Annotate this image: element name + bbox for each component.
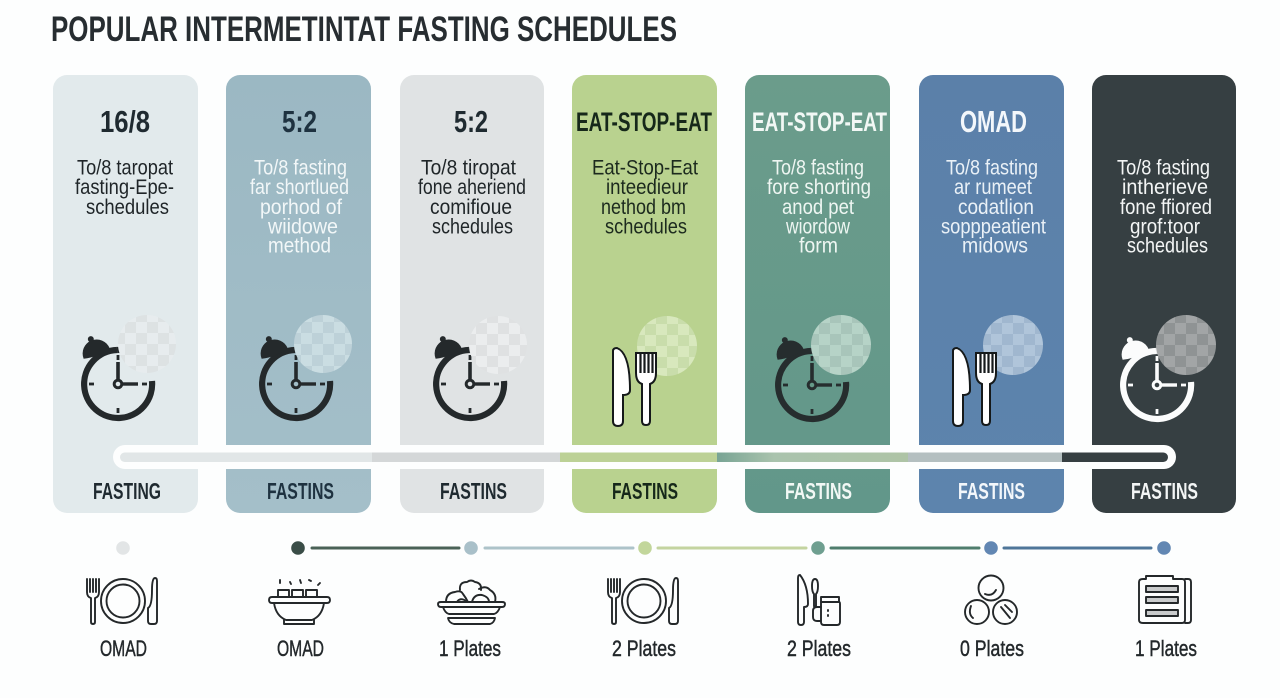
description: dark	[1117, 156, 1212, 258]
description: omad	[941, 156, 1046, 258]
description: 5:2 blue: far shortlued	[250, 175, 349, 199]
label: 2 plates: 2 Plates	[612, 636, 676, 661]
description: dark: fone ffiored	[1120, 195, 1212, 219]
description: eat-stop-eat green: nethod bm	[601, 195, 686, 219]
description: 5:2 grey: comifioue	[430, 195, 512, 219]
label: fasting: FASTING	[93, 478, 161, 504]
description: eat-stop-eat green: schedules	[605, 214, 687, 238]
icon: checker circle	[983, 315, 1043, 375]
description: eat-stop-eat teal: wiordow	[785, 214, 850, 238]
icon: checker circle	[811, 315, 871, 375]
description: 5:2 blue: method	[268, 234, 331, 258]
description: dark: intherieve	[1122, 175, 1208, 199]
description: eat-stop-eat green: Eat-Stop-Eat	[592, 156, 698, 180]
label: 2 plates: 2 Plates	[787, 636, 851, 661]
description: eat-stop-eat teal: To/8 fasting	[772, 156, 864, 180]
panel: 5:2 grey	[400, 75, 544, 513]
description: omad: midows	[962, 234, 1028, 258]
panel: eat-stop-eat green	[572, 75, 717, 513]
description: 5:2 grey	[418, 156, 526, 238]
heading: 5:2: 5:2	[454, 104, 488, 139]
label: fastins: FASTINS	[612, 478, 678, 504]
label: fastins: FASTINS	[1131, 478, 1198, 504]
description: omad: sopppeatient	[941, 214, 1046, 238]
icon: stopwatch	[77, 331, 152, 418]
label: fastins: FASTINS	[785, 478, 852, 504]
description: eat-stop-eat teal	[767, 156, 871, 258]
icon: checker circle	[1156, 315, 1216, 375]
description: 16/8: To/8 taropat	[77, 156, 173, 180]
icon: stopwatch	[1116, 332, 1191, 419]
label: 1 plates: 1 Plates	[1135, 636, 1197, 661]
icon: stopwatch	[429, 331, 504, 418]
description: eat-stop-eat teal: anod pet	[782, 195, 854, 219]
panel: 5:2 blue	[226, 75, 371, 513]
description: 16/8: fasting-Epe-	[75, 175, 174, 199]
icon: plate of food	[438, 580, 505, 624]
icon: knife spoon and mug	[798, 575, 840, 625]
label: fastins: FASTINS	[958, 478, 1025, 504]
description: omad: To/8 fasting	[946, 156, 1038, 180]
icon: clipboard list	[1139, 576, 1191, 623]
icon: stopwatch	[255, 331, 330, 418]
timeline	[116, 541, 1171, 555]
description: eat-stop-eat green: inteedieur	[606, 175, 688, 199]
panel: eat-stop-eat teal	[745, 75, 890, 513]
panel: 16/8	[53, 75, 198, 513]
icon: three circles	[965, 576, 1017, 624]
panel: omad	[919, 75, 1064, 513]
icon: plate with cutlery	[87, 578, 157, 624]
heading: eat-stop-eat: EAT-STOP-EAT	[752, 107, 887, 137]
icon: checker circle	[469, 316, 527, 374]
description: eat-stop-eat teal: fore shorting	[767, 175, 871, 199]
panel: dark	[1092, 75, 1236, 513]
description: eat-stop-eat green	[592, 156, 698, 238]
label: fastins: FASTINS	[440, 478, 507, 504]
description: 5:2 blue: To/8 fasting	[254, 156, 347, 180]
description: 16/8: schedules	[86, 195, 169, 219]
icon: checker circle	[637, 316, 697, 376]
label: 1 plates: 1 Plates	[439, 636, 501, 661]
heading: omad: OMAD	[960, 104, 1027, 139]
description: 5:2 blue	[250, 156, 349, 258]
title: POPULAR INTERMETINTAT FASTING SCHEDULES	[51, 10, 677, 49]
description: 16/8	[75, 156, 174, 219]
progress track	[113, 445, 1176, 469]
description: 5:2 grey: fone aheriend	[418, 175, 526, 199]
heading: 16/8: 16/8	[100, 104, 150, 139]
heading: eat-stop-eat: EAT-STOP-EAT	[576, 107, 712, 137]
label: omad: OMAD	[100, 636, 147, 661]
description: 5:2 grey: To/8 tiropat	[421, 156, 516, 180]
description: 5:2 blue: porhod of	[260, 195, 342, 219]
icon: plate with cutlery	[608, 578, 678, 624]
description: dark: schedules	[1127, 234, 1208, 258]
description: omad: codatlion	[958, 195, 1034, 219]
icon: knife and fork	[613, 348, 656, 426]
description: dark: To/8 fasting	[1117, 156, 1210, 180]
description: dark: grof:toor	[1130, 214, 1200, 238]
label: omad: OMAD	[277, 636, 324, 661]
icon: checker circle	[118, 315, 176, 373]
description: 5:2 grey: schedules	[432, 214, 513, 238]
icon: stopwatch	[771, 332, 846, 419]
description: 5:2 blue: wiidowe	[267, 214, 338, 238]
icon: serving bowl	[269, 580, 330, 624]
description: omad: ar rumeet	[954, 175, 1032, 199]
description: eat-stop-eat teal: form	[799, 234, 838, 258]
label: 0 plates: 0 Plates	[960, 636, 1024, 661]
icon: knife and fork	[953, 348, 996, 426]
label: fastins: FASTINS	[267, 478, 334, 504]
icon: checker circle	[294, 315, 352, 373]
heading: 5:2: 5:2	[282, 104, 317, 139]
